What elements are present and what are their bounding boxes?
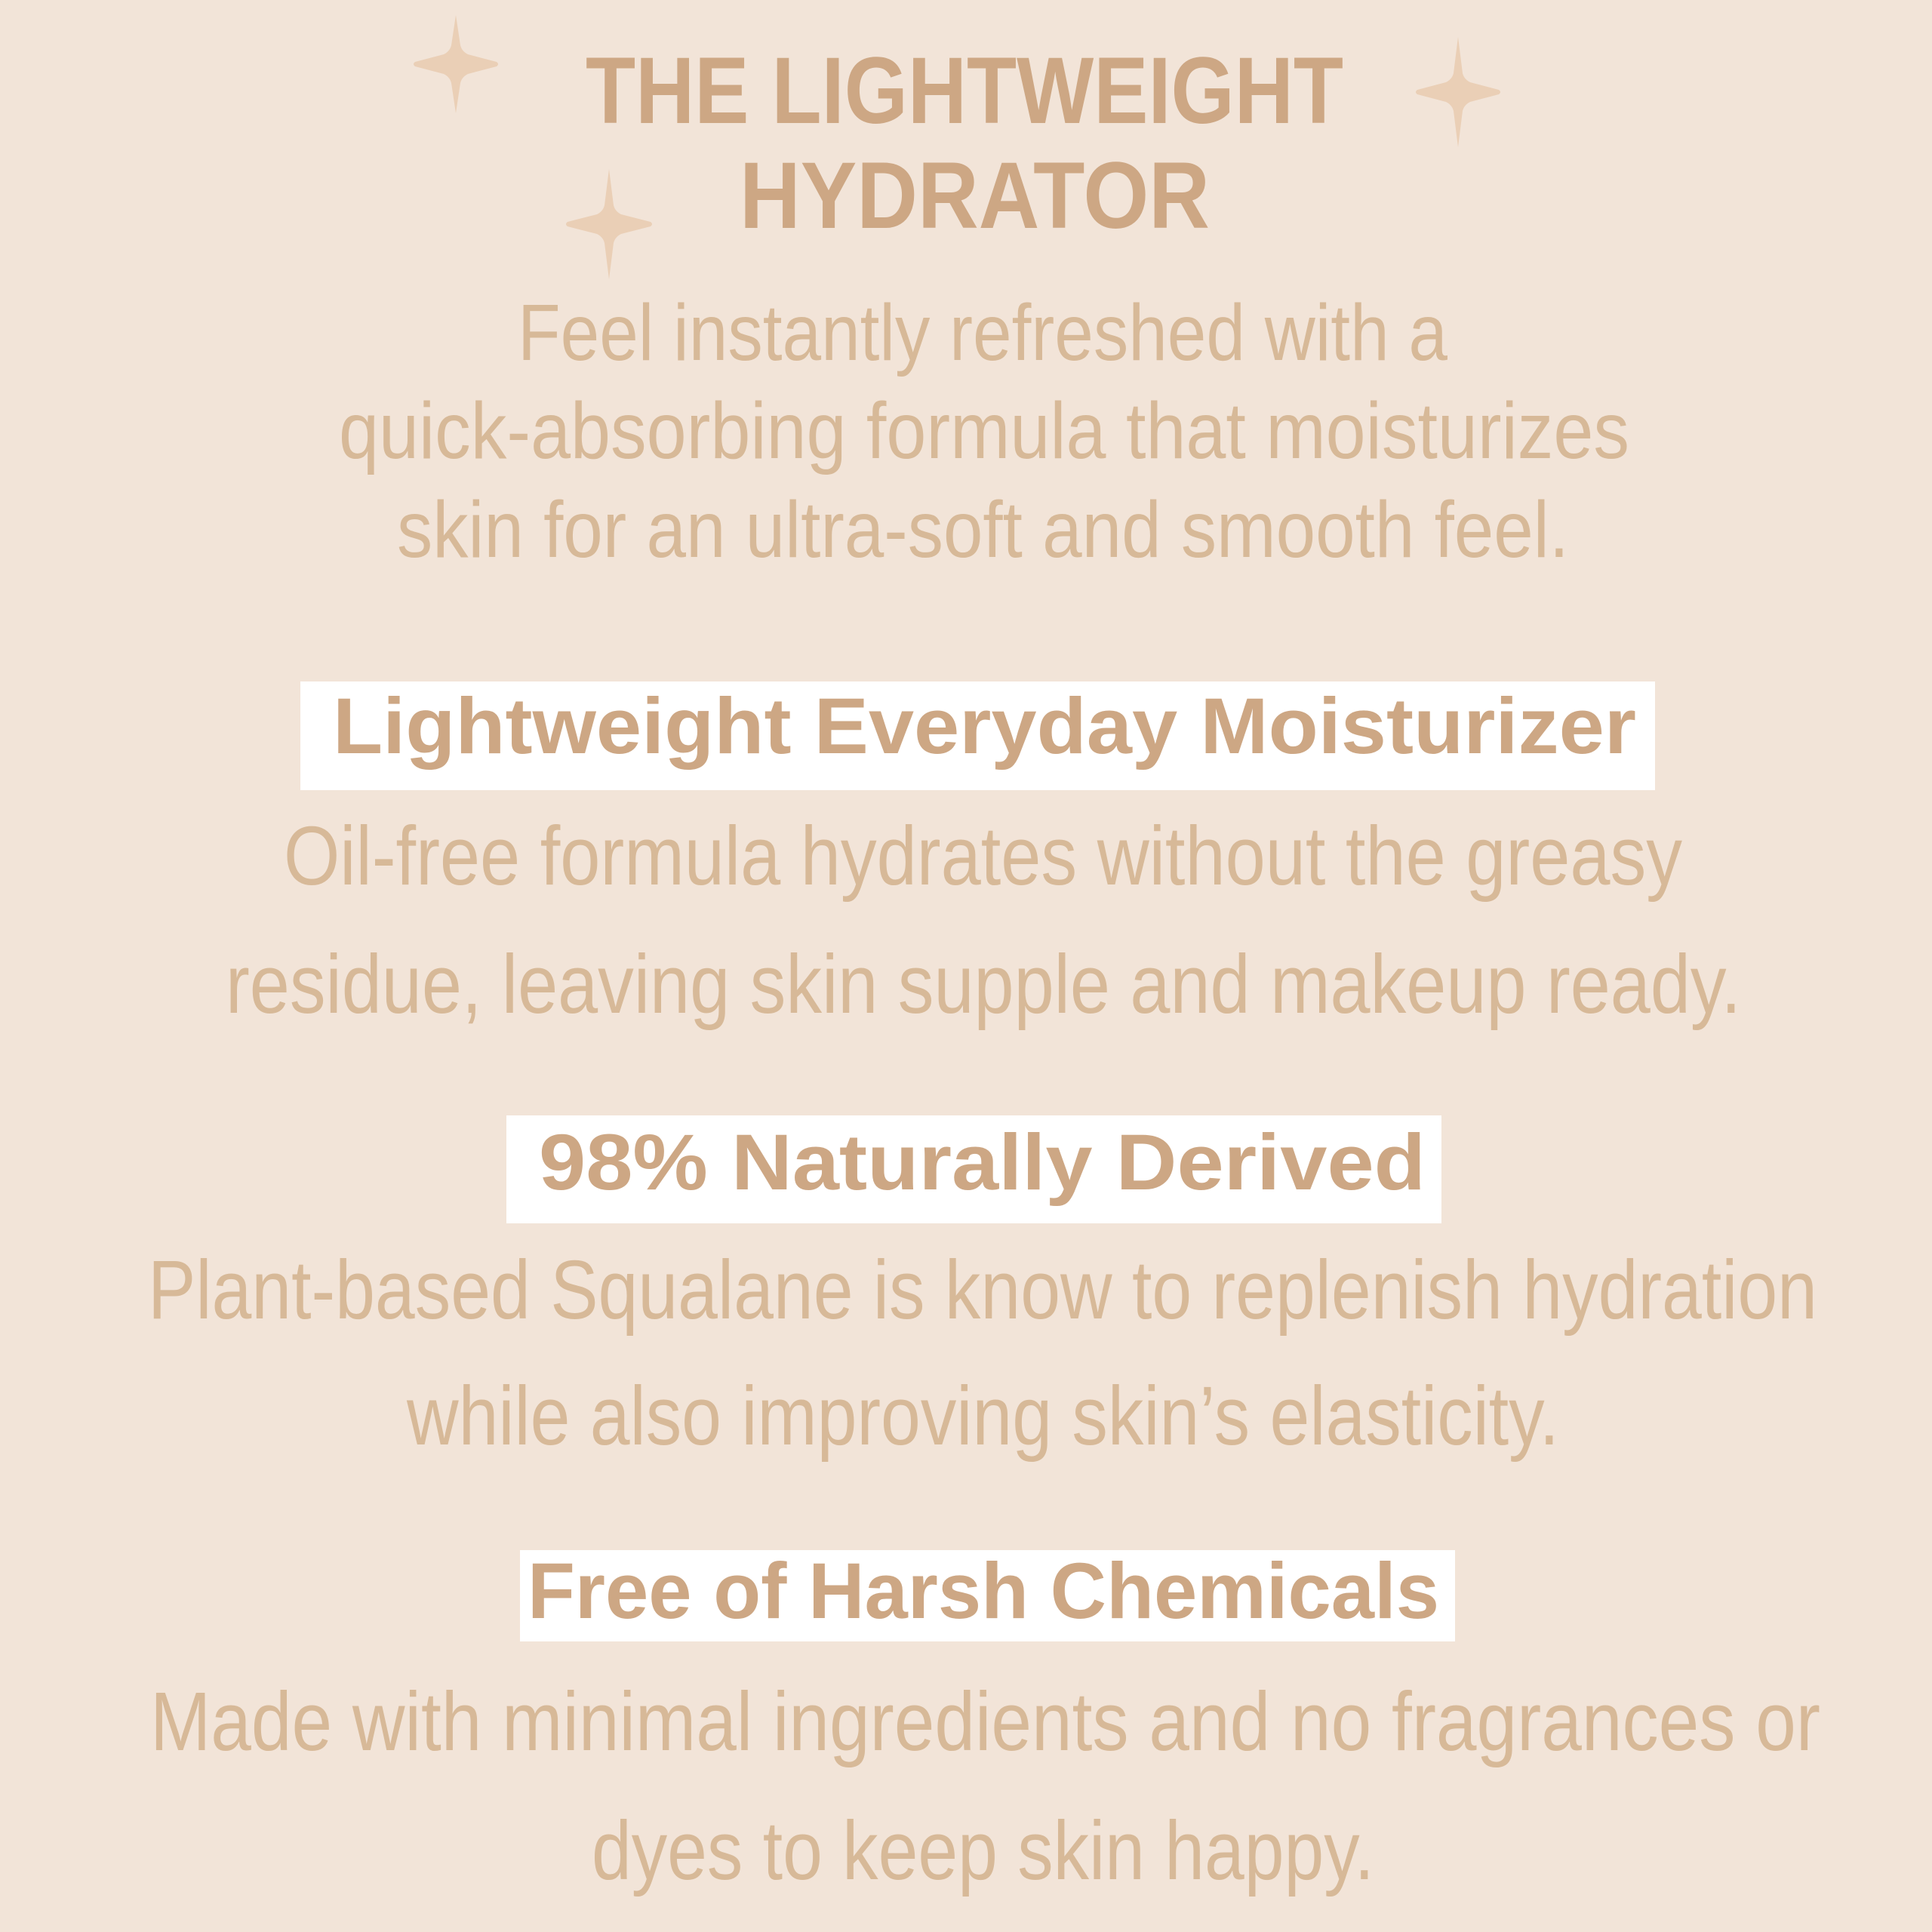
heading box: 98% Naturally Derived: 98% Naturally Derived (539, 1118, 1426, 1207)
title: THE LIGHTWEIGHT (586, 38, 1343, 143)
body text: oil-free: residue, leaving skin supple and makeup ready. (226, 938, 1741, 1031)
body text: minimal ingredients (150, 1675, 1820, 1897)
intro text: quick-absorbing formula that moisturizes (339, 386, 1629, 475)
title: HYDRATOR (740, 143, 1210, 248)
icon: sparkle top-right (1416, 37, 1500, 147)
heading box: Lightweight Everyday Moisturizer: Lightweight Everyday Moisturizer (333, 682, 1636, 771)
intro text (339, 288, 1629, 574)
body text: minimal ingredients: dyes to keep skin happy. (592, 1804, 1374, 1897)
icon: sparkle top-left (414, 15, 498, 113)
heading box: Free of Harsh Chemicals: Free of Harsh Chemicals (528, 1547, 1439, 1635)
intro text: Feel instantly refreshed with a (518, 288, 1447, 377)
body text: oil-free: Oil-free formula hydrates without the greasy (284, 810, 1682, 903)
body text: oil-free (226, 810, 1741, 1031)
title (586, 38, 1343, 248)
body text: squalane: while also improving skin’s elasticity. (406, 1370, 1559, 1463)
intro text: skin for an ultra-soft and smooth feel. (397, 485, 1569, 574)
body text: squalane (148, 1244, 1817, 1463)
icon: sparkle lower-left (566, 169, 652, 279)
